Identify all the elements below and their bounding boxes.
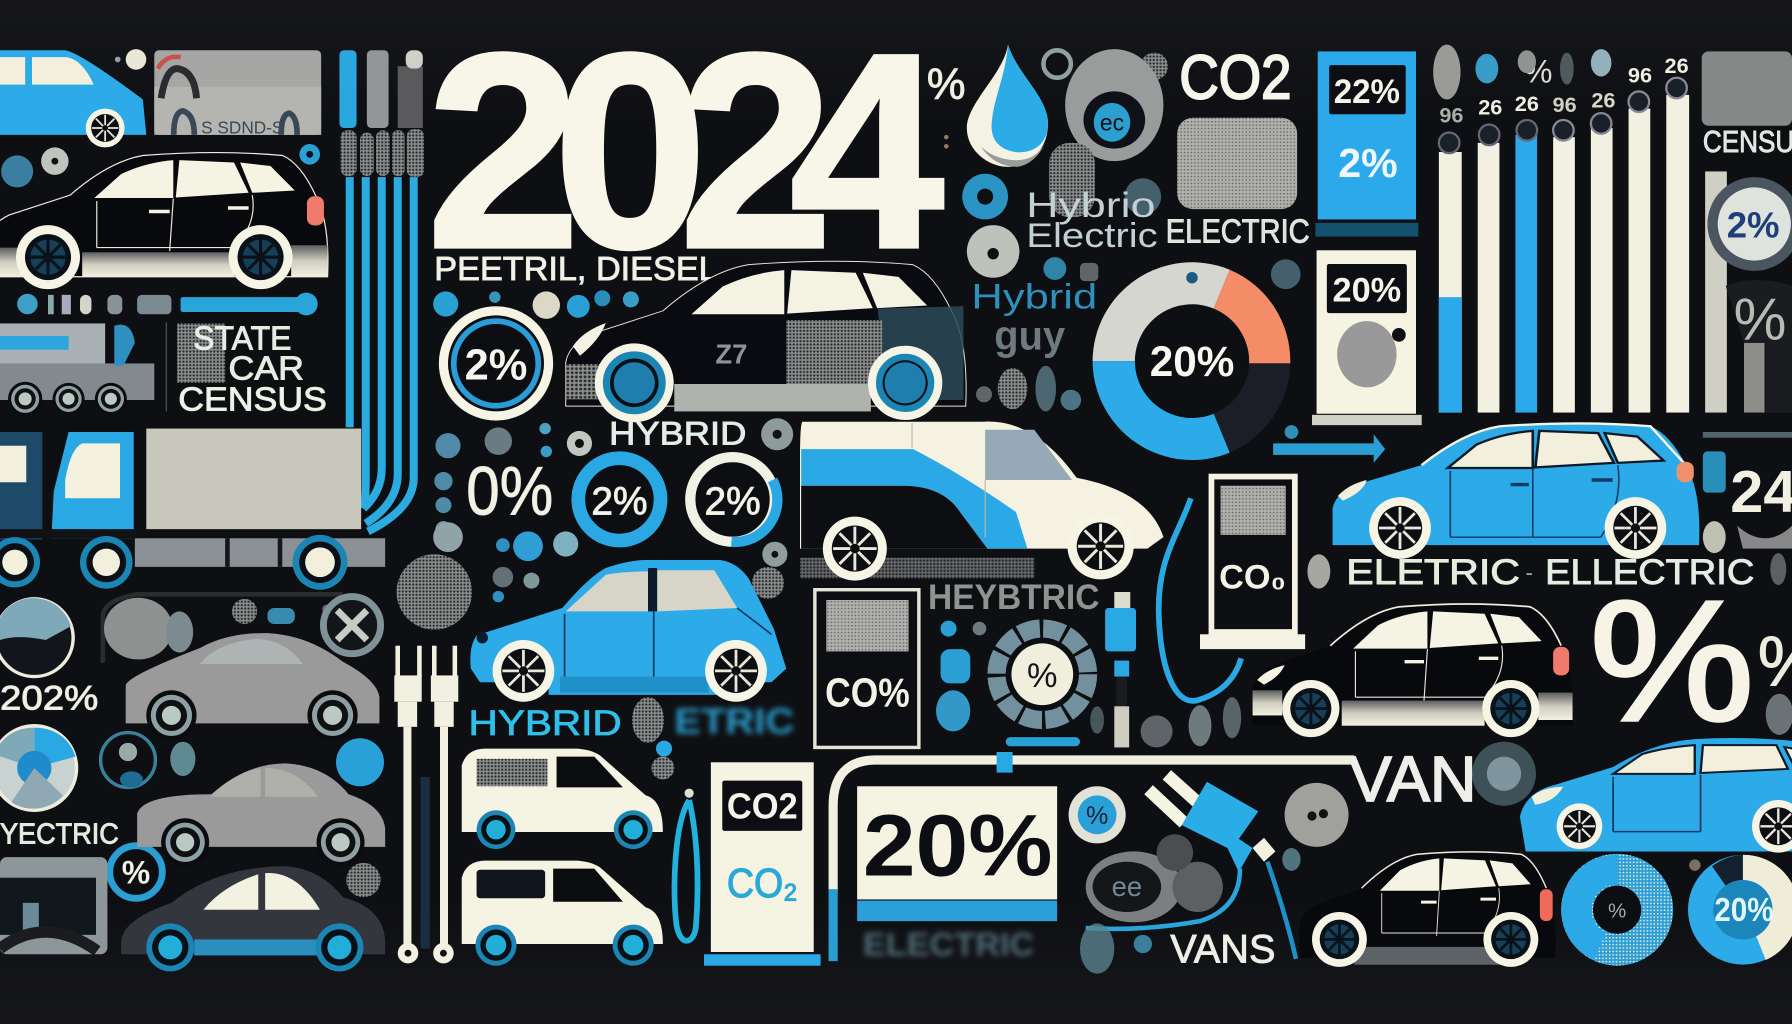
hybrid electric gray labels: ELECTRIC <box>1166 213 1310 250</box>
right gauge: 2% <box>1727 205 1780 246</box>
zero percent text: 0% <box>466 452 553 529</box>
blue stat panel: 22% <box>1334 73 1400 111</box>
state car census label: CENSUS <box>178 381 327 418</box>
outlet and socket: ee <box>1112 871 1142 902</box>
state car census label: CAR <box>229 350 304 387</box>
electric labels <box>1307 552 1786 592</box>
fuel pump centre <box>1159 477 1305 701</box>
bar chart: 96 <box>1553 92 1577 117</box>
blue stat panel: 2% <box>1338 140 1398 186</box>
fuel pump with CO percent: CO% <box>825 669 910 715</box>
hybrid electric gray labels: Electric <box>1026 217 1158 255</box>
percent ring small <box>110 846 162 898</box>
gray cylinders and wheel icon <box>103 554 472 786</box>
small dots near van <box>115 49 320 165</box>
blobs above bars: % <box>1524 53 1553 89</box>
electric plug icon <box>1149 775 1296 959</box>
hybrid label: HYBRID <box>609 416 746 452</box>
fuel pump bottom <box>674 762 821 966</box>
electric labels: ELLECTRIC <box>1545 552 1754 592</box>
cream stat panel: 20% <box>1333 272 1401 310</box>
electric labels: - <box>1525 560 1533 586</box>
cream 2 percent ring: 2% <box>704 480 761 523</box>
fuel pump bottom: CO₂ <box>727 860 798 906</box>
hybrid guy labels <box>971 257 1301 411</box>
bar chart: 26 <box>1591 87 1615 112</box>
hybrid electric gray labels: Hybrio <box>1026 185 1155 225</box>
2 percent ring: 2% <box>465 341 527 389</box>
blue arrow <box>1273 425 1385 463</box>
2 percent ring <box>443 311 549 416</box>
donut bottom left of pair: % <box>1608 900 1626 923</box>
blue 2 percent ring <box>578 458 661 541</box>
percent near title <box>927 60 965 149</box>
gray ovoid emblem <box>1043 49 1168 161</box>
white van two <box>462 861 663 966</box>
donut 20 percent: 20% <box>1714 892 1774 929</box>
electric labels: ELETRIC <box>1346 552 1520 592</box>
charging cables left <box>394 646 458 963</box>
fuel pump with CO percent <box>815 590 919 747</box>
right gauge <box>1707 177 1792 413</box>
hebtric label: HEYBTRIC <box>928 577 1099 617</box>
donut chart 20 percent: 20% <box>1150 338 1234 385</box>
small round icon blue <box>1069 786 1126 843</box>
bar chart: 26 <box>1665 53 1689 78</box>
van heading <box>1349 742 1536 815</box>
percent gauge dial: % <box>1027 657 1058 695</box>
bar chart: 26 <box>1478 94 1502 119</box>
label on van: S SDND-S <box>201 118 283 138</box>
subtitle petrol diesel: PEETRIL, DIESEL <box>434 251 718 288</box>
big percent: % <box>1590 566 1754 757</box>
outlet and socket <box>1080 834 1240 974</box>
state car census label: STATE <box>193 321 291 358</box>
cable connectors <box>339 50 424 177</box>
white van one <box>462 749 663 849</box>
fuel pump bottom: CO2 <box>727 785 798 826</box>
dots near bottom cars <box>1282 848 1701 871</box>
bar chart: 96 <box>1628 62 1652 87</box>
vans label: VANS <box>1170 927 1275 971</box>
bar chart: 96 <box>1439 102 1463 127</box>
small round icon blue: % <box>1086 802 1108 830</box>
co2 heading: CO2 <box>1179 43 1291 112</box>
small circle cluster by sedans <box>101 733 195 787</box>
blue car lower right <box>1520 738 1792 853</box>
donut chart 20 percent <box>1093 262 1290 460</box>
gray sedan one <box>126 633 379 741</box>
black car centre: Z7 <box>715 338 747 369</box>
state car census label <box>166 321 327 418</box>
left ring gauge: 202% <box>0 680 98 718</box>
dots under subtitle <box>433 290 793 602</box>
charging plug column <box>1090 592 1241 747</box>
big 20 percent panel: 20% <box>863 797 1053 894</box>
black car centre <box>566 261 966 418</box>
gray sedan two <box>137 763 385 866</box>
blue stat panel <box>1315 51 1418 237</box>
small gray truck <box>0 323 154 416</box>
row of small icons <box>1 147 318 315</box>
hybrid guy labels: guy <box>994 313 1065 359</box>
left pie chart <box>0 726 77 810</box>
big 20 percent panel: ELECTRIC <box>863 926 1034 962</box>
van heading: VAN <box>1349 743 1477 815</box>
right gauge: % <box>1734 285 1786 352</box>
hybrid electric gray labels <box>962 143 1310 278</box>
blurred electric label <box>632 697 794 779</box>
blue car middle <box>470 560 786 702</box>
black car top left <box>0 153 328 289</box>
dark sedan three <box>121 863 385 971</box>
gray ovoid emblem: ec <box>1100 109 1124 135</box>
vehicle fragment bottom left <box>0 857 107 954</box>
bar chart <box>1439 53 1765 413</box>
blobs above bars <box>1433 45 1611 99</box>
dotted gray block <box>1177 118 1297 209</box>
right side 24 fragment <box>1703 432 1792 553</box>
cream stat panel <box>1312 250 1422 425</box>
title 2024: 2024 <box>426 0 946 306</box>
blue car right <box>1333 423 1699 559</box>
left ring gauge <box>0 598 98 718</box>
blue car top left <box>0 50 146 147</box>
blue 2 percent ring: 2% <box>591 480 648 523</box>
hybrid guy labels: Hybrid <box>971 277 1097 317</box>
percent ring small: % <box>122 854 150 890</box>
donut 20 percent <box>1688 855 1792 965</box>
black car bottom <box>1299 852 1556 967</box>
percent gauge dial <box>936 621 1088 746</box>
fuel pump centre: CO₀ <box>1219 559 1286 597</box>
gray delivery van top left <box>154 50 321 138</box>
hybrid cyan label: HYBRID <box>469 703 622 743</box>
icon: water drop <box>967 45 1048 167</box>
long cable frame <box>833 752 1354 961</box>
blurred electric label: ETRIC <box>674 701 794 742</box>
electric label left: YECTRIC <box>0 818 119 850</box>
census corner block <box>1702 51 1792 159</box>
gray round icon <box>1285 783 1349 847</box>
blue cables <box>350 177 414 531</box>
blue truck <box>0 429 385 590</box>
cream 2 percent ring <box>690 457 777 542</box>
black car lower right <box>1253 604 1573 737</box>
bar chart: 26 <box>1515 91 1539 116</box>
big 20 percent panel <box>857 786 1057 962</box>
percent near title: % <box>927 60 965 108</box>
donut bottom left of pair <box>1561 855 1657 960</box>
white and blue van car <box>800 422 1163 581</box>
